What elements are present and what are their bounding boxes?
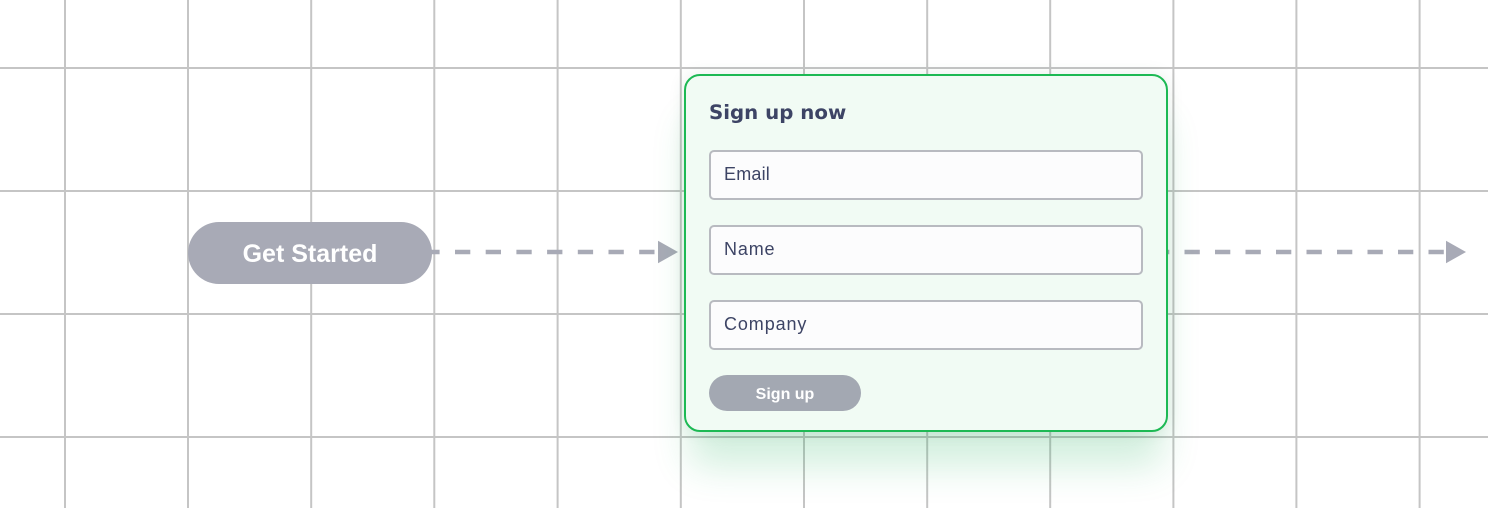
input: Email (709, 150, 1143, 200)
button: Get Started (188, 222, 432, 284)
input: Name (709, 225, 1143, 275)
button: Sign up (709, 375, 861, 411)
input: Company (709, 300, 1143, 350)
button: Get Started: Get Started (243, 240, 377, 268)
input: Company: Company (724, 314, 807, 334)
button: Sign up: Sign up (756, 386, 814, 403)
input: Name: Name (724, 239, 775, 259)
panel: sign up form (684, 74, 1168, 432)
heading: Sign up now: Sign up now (709, 101, 846, 124)
input: Email: Email (724, 164, 770, 184)
